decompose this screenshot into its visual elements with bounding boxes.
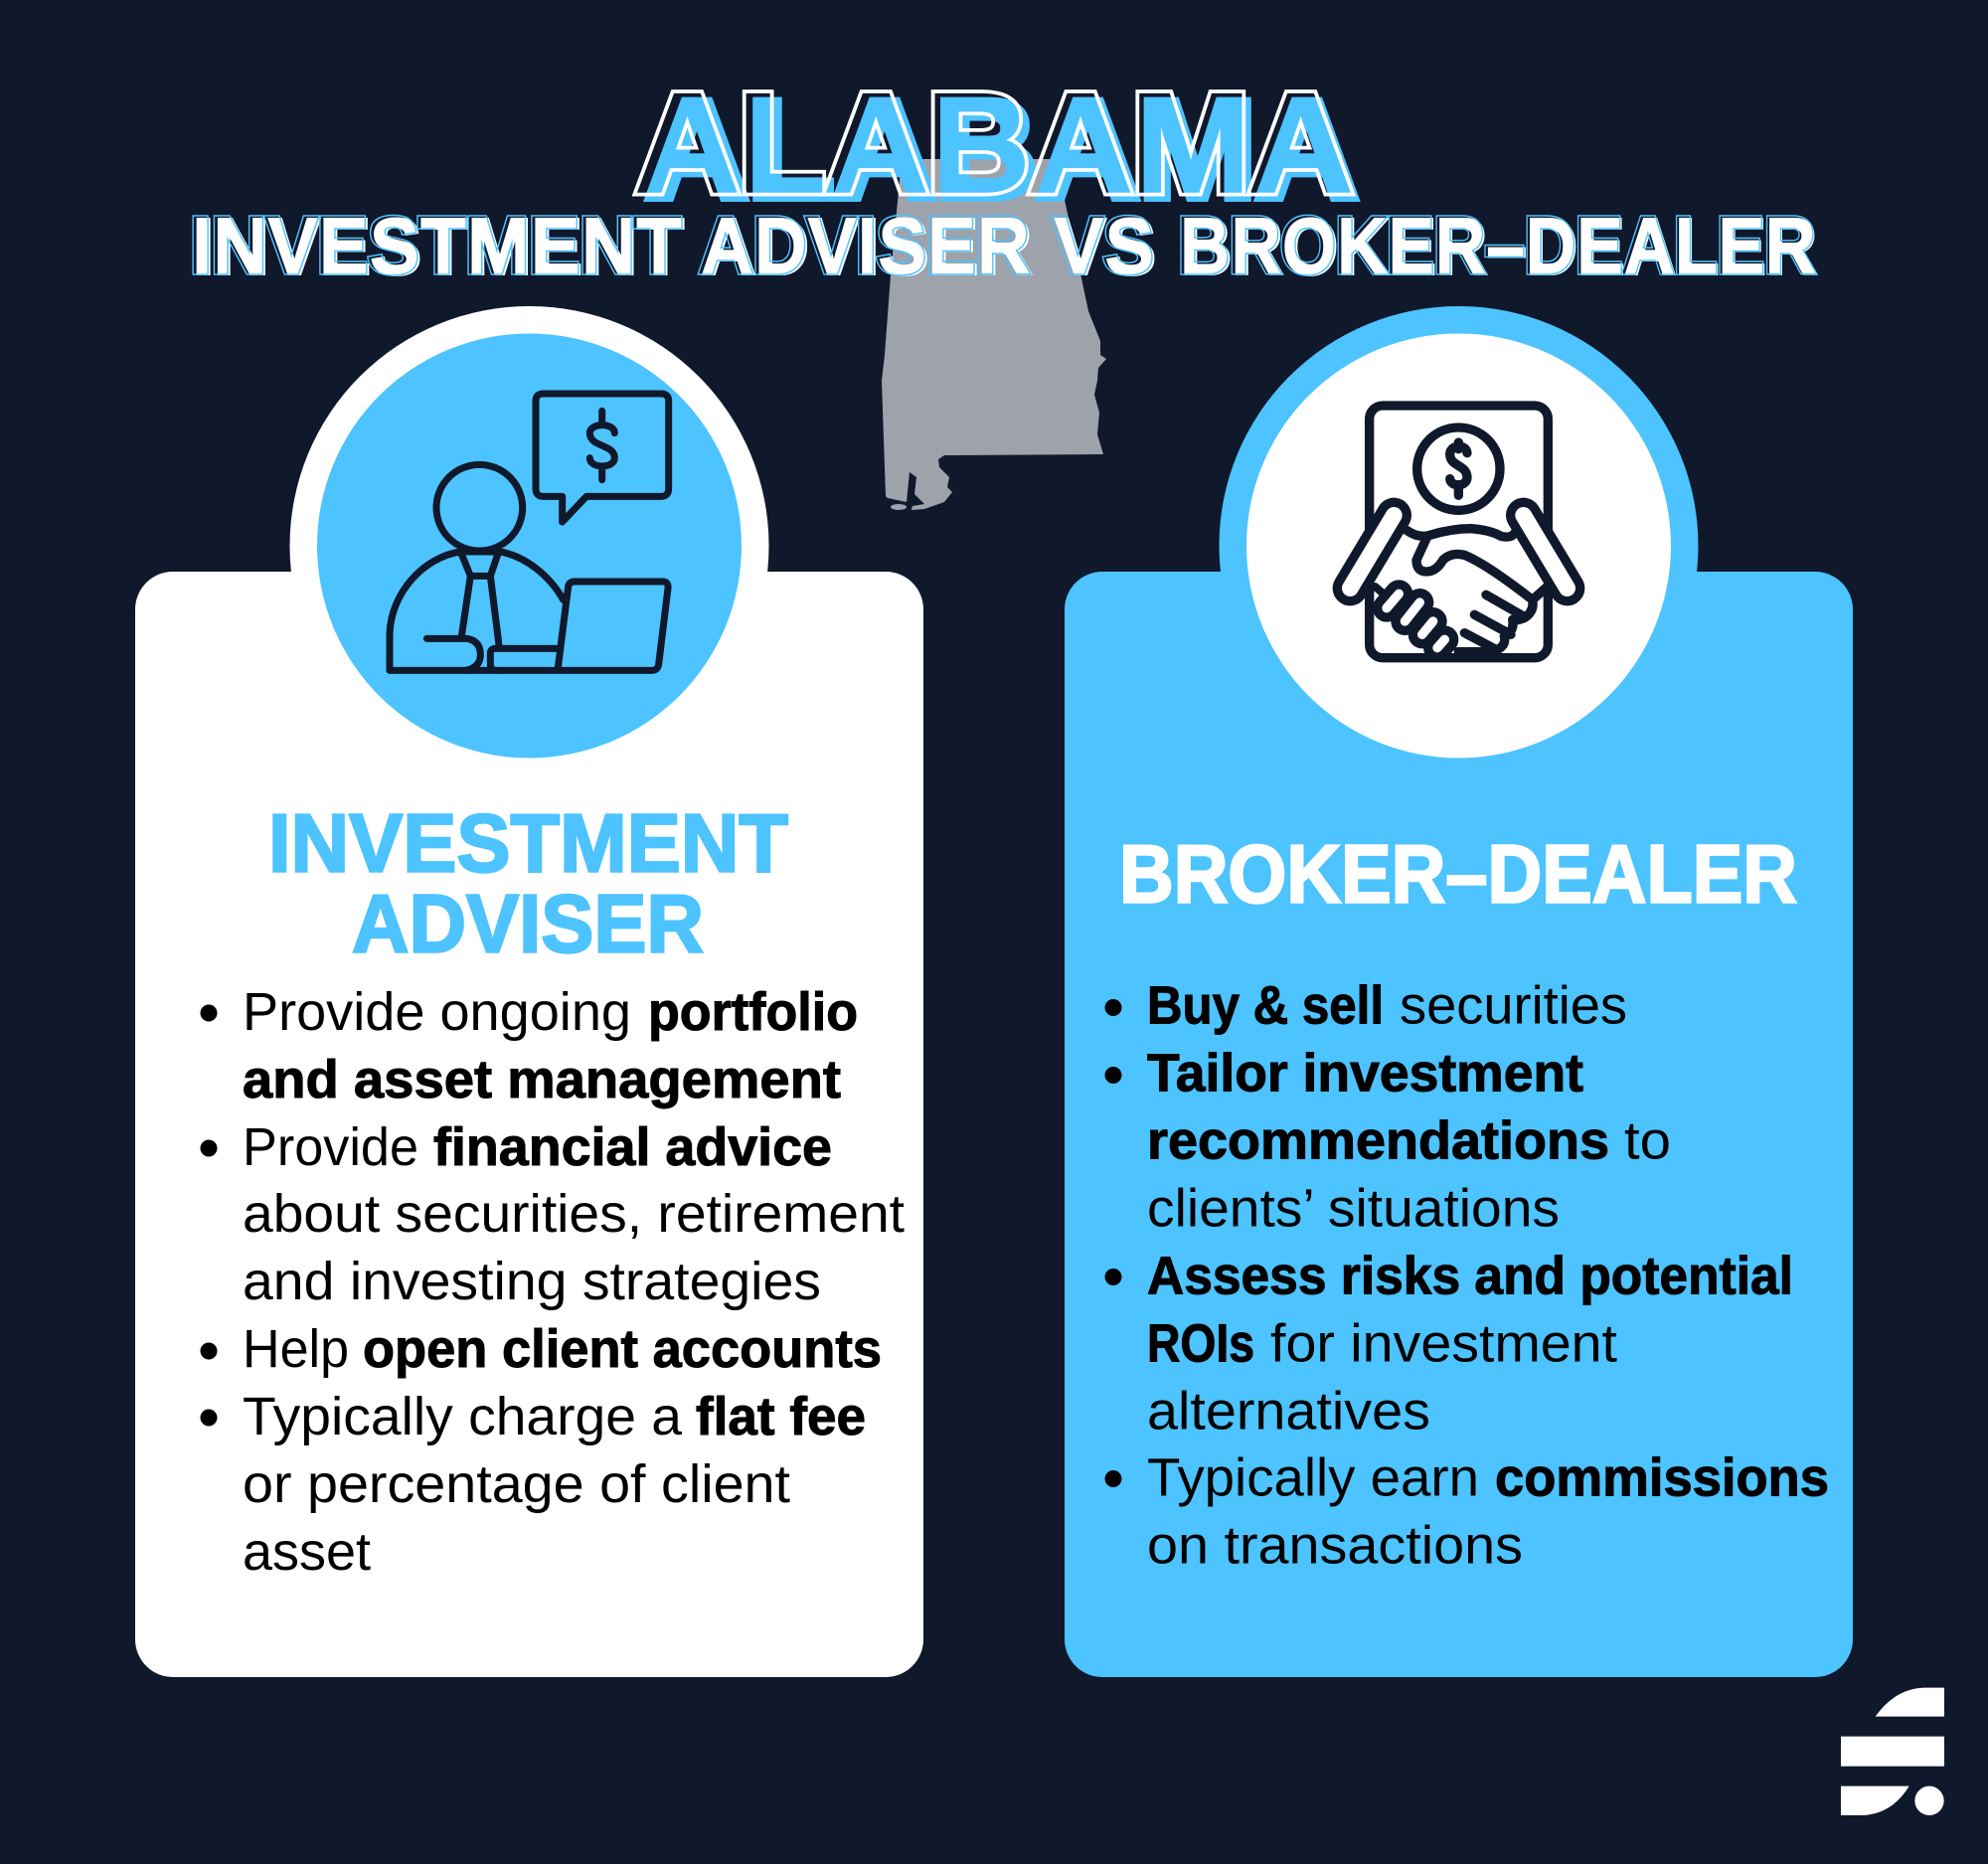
panel: investment adviser <box>135 306 923 1677</box>
subtitle: investment adviser vs broker-dealer: BROKER–DEALER <box>1178 201 1815 289</box>
map of Alabama <box>882 159 1106 510</box>
bullet list: investment adviser duties: Help <box>243 1319 349 1379</box>
heading: investment adviser: ADVISER <box>352 877 704 970</box>
bullet list: investment adviser duties: portfolio <box>648 982 858 1042</box>
bullet list: broker-dealer duties <box>1105 976 1829 1575</box>
bullet list: broker-dealer duties: securities <box>1400 976 1627 1036</box>
title: ALABAMA: ALABAMA <box>636 65 1352 221</box>
bullet list: investment adviser duties <box>201 982 905 1582</box>
bullet list: broker-dealer duties: to <box>1624 1111 1671 1171</box>
icon badge: adviser at laptop <box>290 306 769 785</box>
subtitle: investment adviser vs broker-dealer: VS <box>1053 201 1153 289</box>
heading: investment adviser <box>268 797 788 970</box>
bullet list: broker-dealer duties: commissions <box>1495 1447 1829 1507</box>
icon badge: handshake over document <box>1219 306 1698 785</box>
subtitle: investment adviser vs broker-dealer: ADVISER <box>702 203 1032 290</box>
bullet list: investment adviser duties: Provide ongoing <box>243 982 631 1042</box>
bullet list: investment adviser duties: open client accounts <box>363 1319 882 1379</box>
subtitle: investment adviser vs broker-dealer <box>192 215 1819 276</box>
bullet list: investment adviser duties: or percentage of client <box>243 1454 790 1514</box>
bullet list: investment adviser duties: asset <box>243 1522 371 1582</box>
title: ALABAMA: ALABAMA <box>646 72 1358 227</box>
panel: broker-dealer <box>1065 306 1853 1677</box>
bullet list: investment adviser duties: and investing strategies <box>243 1252 821 1311</box>
subtitle: investment adviser vs broker-dealer: INVESTMENT <box>190 201 681 289</box>
bullet list: investment adviser duties: and asset management <box>243 1050 841 1109</box>
heading: broker-dealer: BROKER–DEALER <box>1119 827 1797 921</box>
subtitle: investment adviser vs broker-dealer: BROKER–DEALER <box>1181 203 1817 290</box>
subtitle: investment adviser vs broker-dealer: ADVISER <box>699 201 1029 289</box>
bullet list: broker-dealer duties: clients’ situations <box>1147 1179 1560 1239</box>
bullet list: broker-dealer duties: on transactions <box>1147 1515 1523 1575</box>
bullet list: broker-dealer duties: recommendations <box>1147 1111 1609 1171</box>
subtitle: investment adviser vs broker-dealer: VS <box>1056 203 1156 290</box>
bullet list: broker-dealer duties: Buy & sell <box>1147 976 1384 1036</box>
bullet list: broker-dealer duties: ROIs <box>1147 1314 1254 1374</box>
bullet list: broker-dealer duties: Typically earn <box>1147 1447 1479 1507</box>
bullet list: investment adviser duties: about securities, retirement <box>243 1184 905 1244</box>
logo <box>1841 1688 1944 1815</box>
subtitle: investment adviser vs broker-dealer: INVESTMENT <box>193 203 684 290</box>
bullet list: broker-dealer duties: for investment <box>1270 1314 1617 1374</box>
bullet list: broker-dealer duties: Assess risks and potential <box>1147 1247 1793 1306</box>
bullet list: investment adviser duties: Provide <box>243 1117 418 1177</box>
bullet list: investment adviser duties: financial advice <box>433 1117 832 1177</box>
heading: investment adviser: INVESTMENT <box>268 797 788 889</box>
bullet list: investment adviser duties: flat fee <box>696 1387 866 1446</box>
bullet list: broker-dealer duties: alternatives <box>1147 1382 1430 1441</box>
bullet list: investment adviser duties: Typically charge a <box>243 1387 683 1446</box>
bullet list: broker-dealer duties: Tailor investment <box>1147 1044 1583 1103</box>
